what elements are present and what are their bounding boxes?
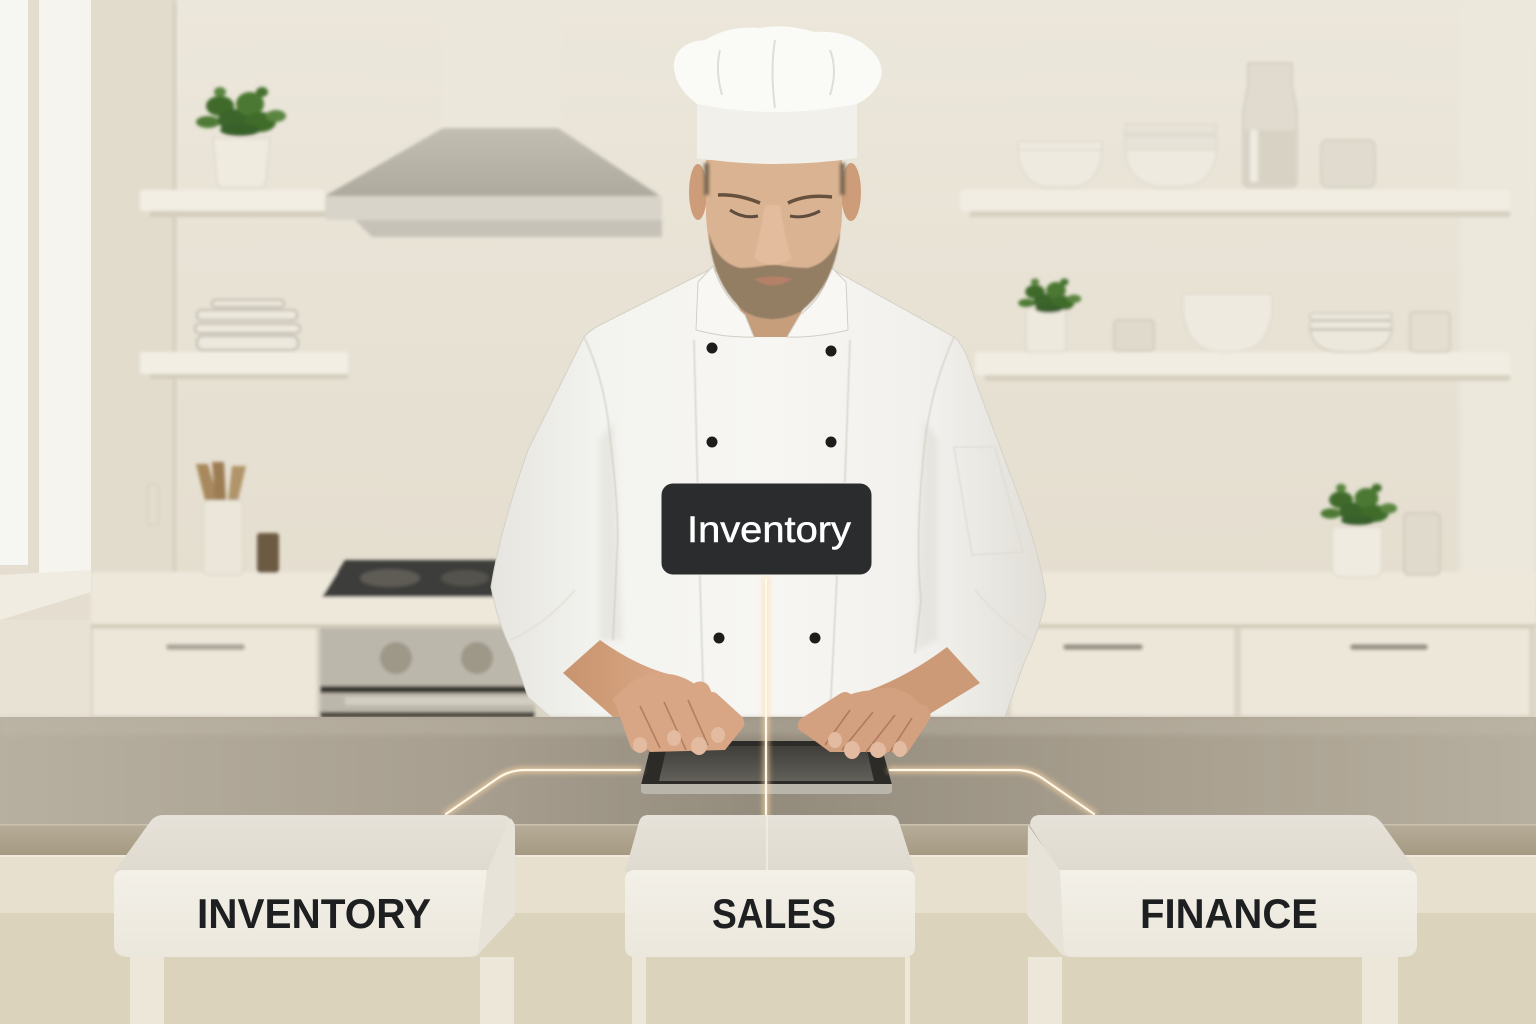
beard [709,233,840,319]
temple hair [704,163,845,195]
hands over tablet [612,673,928,759]
small glasses on right shelf [1114,312,1450,352]
eyes [730,210,820,217]
glass jar [1321,140,1375,187]
left forearm [563,640,680,745]
jar on counter [1404,513,1440,575]
range hood [325,0,662,237]
bowl on right shelf [1183,294,1272,352]
back kitchen counter [91,462,1536,718]
utensil crock [196,462,246,575]
potted plant on left shelf [196,87,286,188]
Inventory callout tag: Inventory [687,509,852,550]
face [706,160,842,316]
right upper shelf [960,190,1510,217]
left lower shelf [140,352,348,379]
jacket folds and panel seams [510,337,1030,717]
small plant on right shelf [1018,278,1081,352]
steel work counter [0,717,1536,856]
pepper mill [257,533,279,573]
background shelving and items [140,0,1510,381]
FINANCE label: FINANCE [1140,890,1318,937]
right cabinet door 2 [1240,628,1530,717]
right hand [797,688,928,759]
jacket buttons [706,342,836,644]
left upper shelf [140,190,325,217]
chef hat [674,26,882,164]
eyebrows [718,195,832,203]
Finance box [1027,815,1417,957]
plates on right shelf [1310,313,1392,352]
jacket shading [600,420,938,650]
right forearm [865,647,980,745]
nose [754,205,792,265]
stove burners [322,560,500,597]
potted plant on counter [1321,484,1397,577]
chef [491,26,1046,745]
right lower shelf [975,352,1510,381]
jacket [491,268,1046,717]
plate stack [195,300,300,350]
tablet [641,741,892,794]
oven [320,628,535,718]
lower cabinetry [0,855,1536,1024]
ears [689,163,861,221]
wall outlet [148,485,158,525]
left hand [612,673,745,755]
collar [696,266,848,337]
INVENTORY label: INVENTORY [197,890,431,937]
neck [725,280,820,337]
bowls upper shelf [1018,124,1217,187]
glass bottle [1243,63,1297,187]
right cabinet door 1 [1010,628,1235,717]
mouth [754,276,792,286]
Sales box [625,815,915,957]
window on the left wall [0,0,177,720]
Inventory callout tag [661,483,872,575]
Inventory box [114,815,515,957]
background: kitchen wall [0,0,1536,720]
left cabinet door [92,628,317,717]
glowing connection lines [446,578,1094,870]
SALES label: SALES [712,890,836,937]
